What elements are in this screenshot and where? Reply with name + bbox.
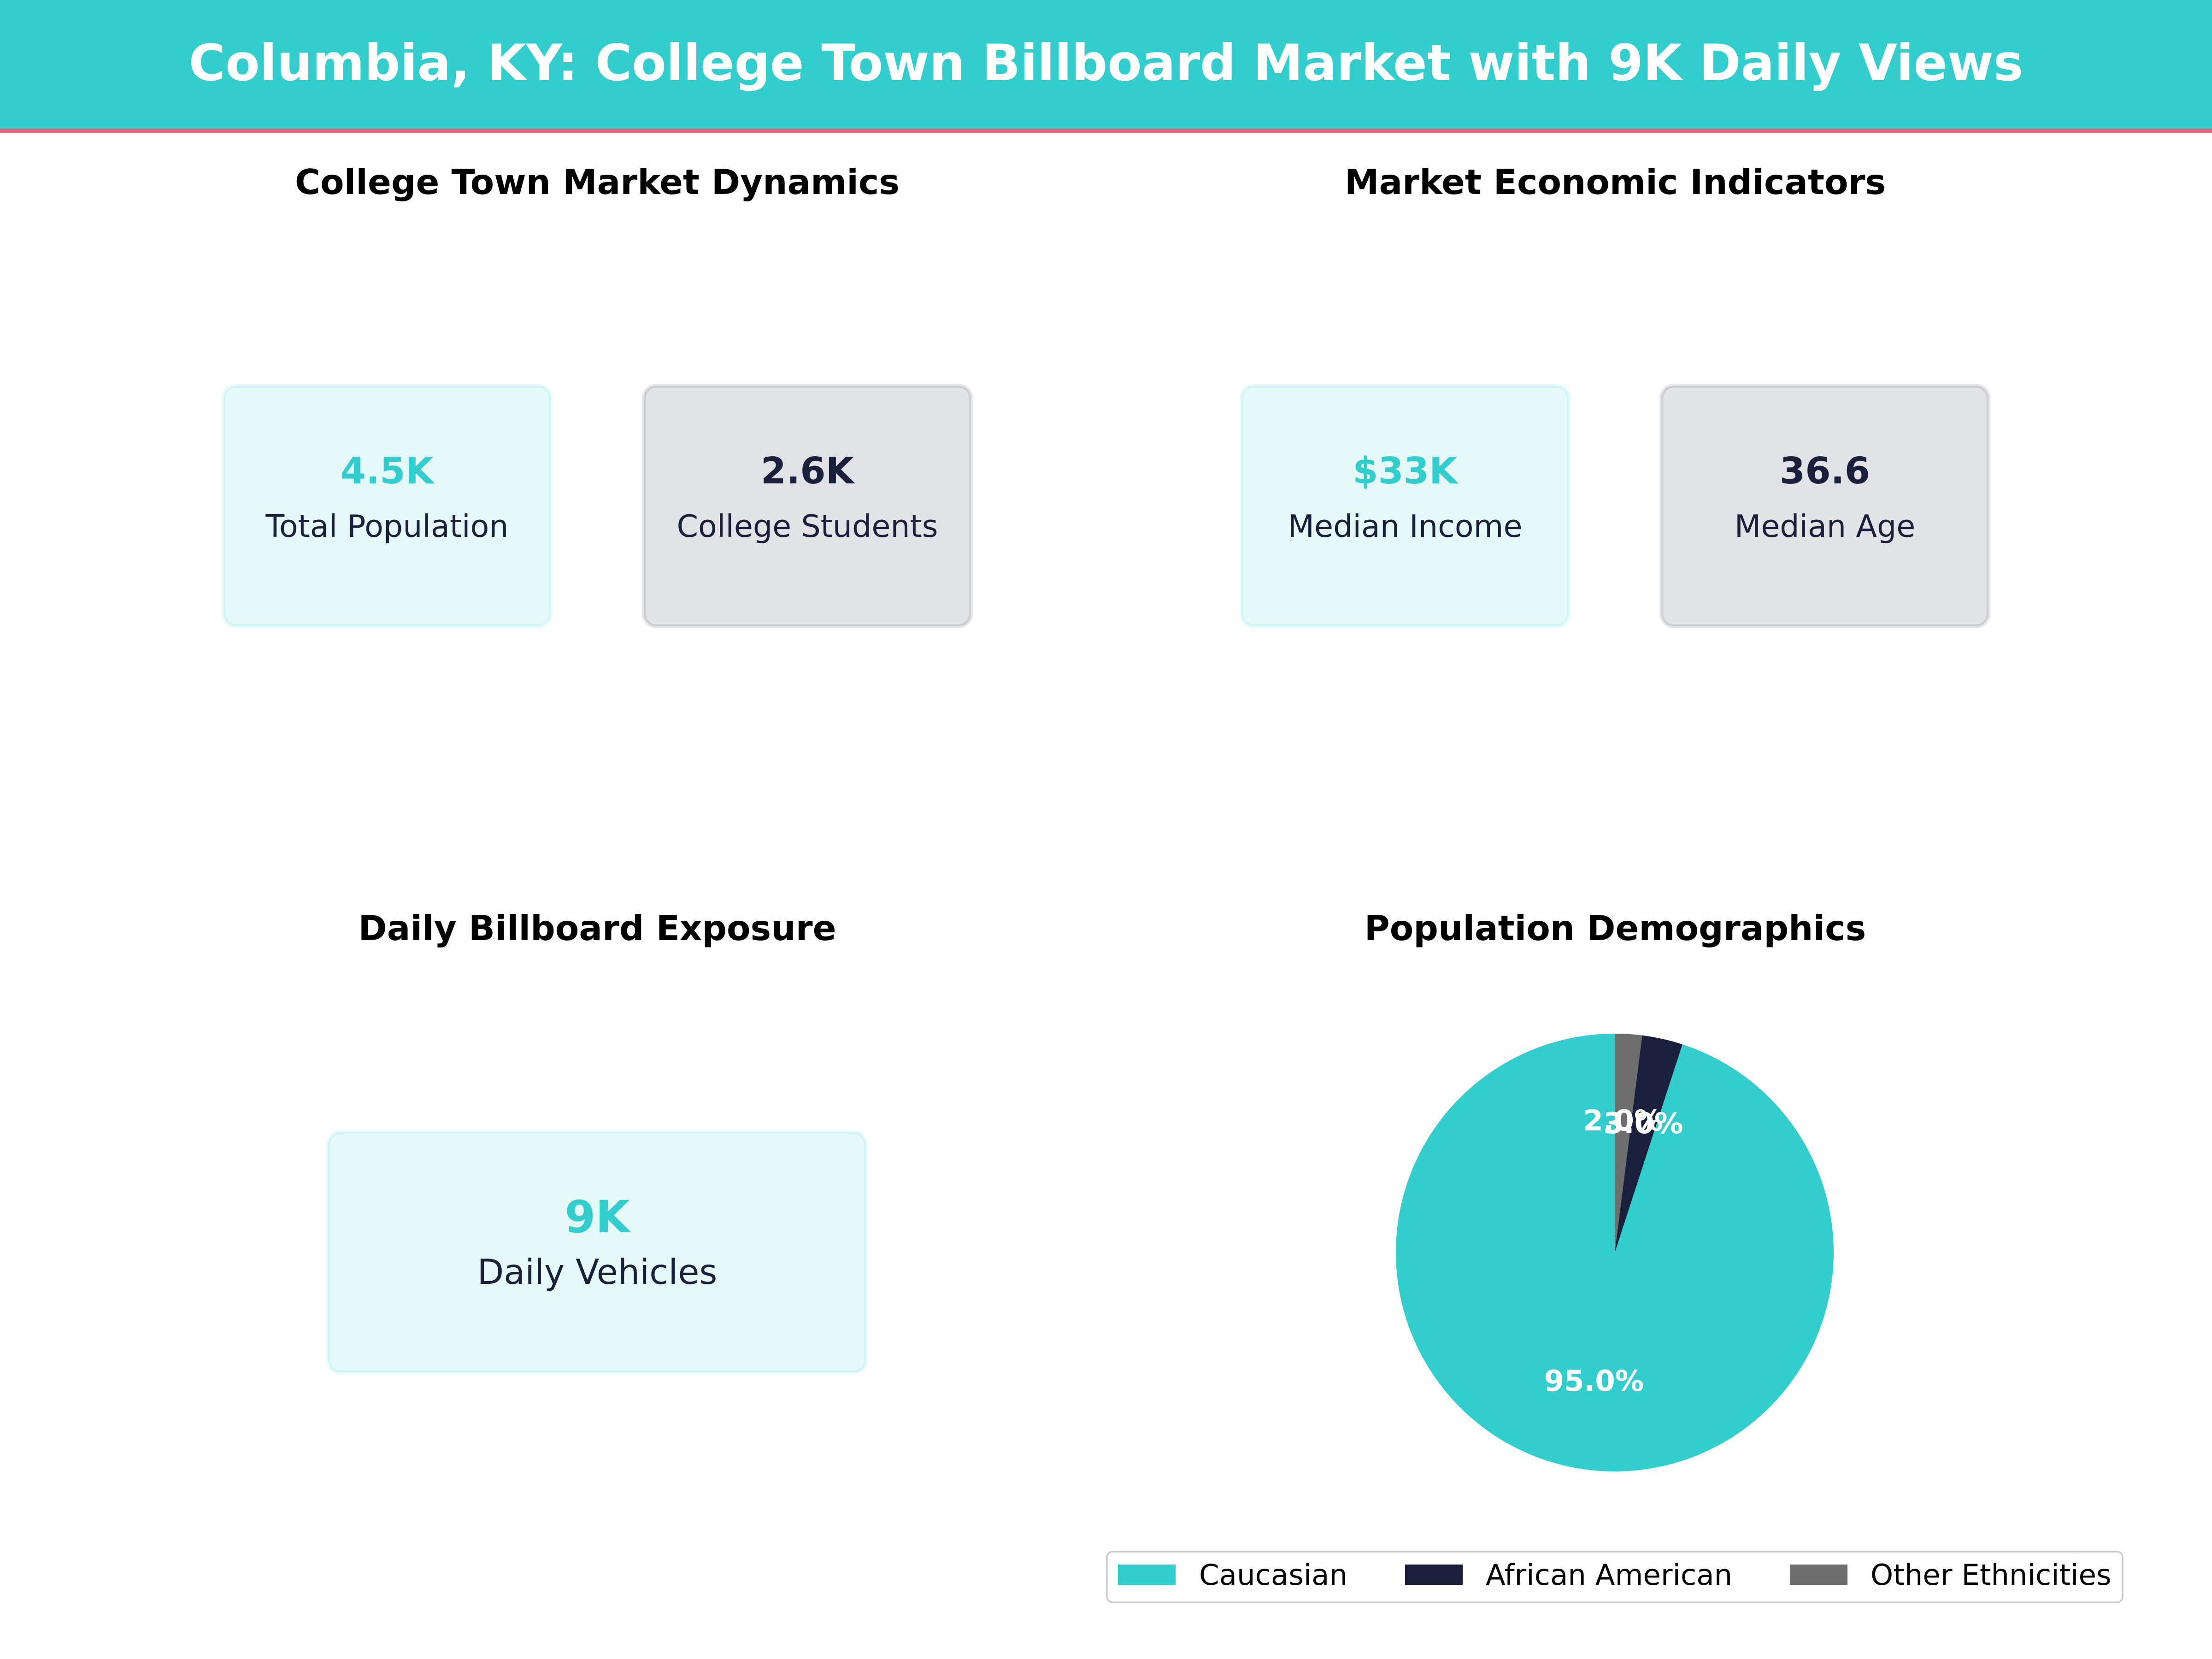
- stat card: median age: 36.6: [1780, 449, 1870, 492]
- stat card: total population: [224, 386, 551, 626]
- heading: market economic indicators: Market Economic Indicators: [1345, 162, 1886, 202]
- header banner: [0, 0, 2212, 133]
- pie chart: 3.0%: [1603, 1106, 1683, 1140]
- pie chart: 95.0%: [1544, 1364, 1644, 1398]
- stat card: college students: [644, 386, 971, 626]
- heading: college town market dynamics: College Town Market Dynamics: [295, 162, 900, 202]
- stat card: college students: 2.6K: [761, 449, 856, 492]
- legend: Caucasian: [1199, 1558, 1347, 1592]
- panel: market economic indicators: [1241, 162, 1988, 626]
- title: Columbia, KY: College Town Billboard Market with 9K Daily Views: [189, 34, 2023, 92]
- pie chart: [1396, 1034, 1834, 1471]
- heading: population demographics: Population Demographics: [1365, 908, 1866, 948]
- legend: [1107, 1552, 2123, 1602]
- stat card: median age: [1661, 386, 1988, 626]
- legend: Other Ethnicities: [1871, 1558, 2112, 1592]
- panel: daily billboard exposure: [328, 908, 866, 1372]
- stat card: median age: Median Age: [1735, 508, 1915, 544]
- legend: African American: [1486, 1558, 1732, 1592]
- stat card: daily vehicles: 9K: [565, 1191, 631, 1243]
- stat card: college students: College Students: [677, 508, 938, 544]
- stat card: daily vehicles: Daily Vehicles: [477, 1252, 717, 1292]
- stat card: total population: 4.5K: [341, 449, 435, 492]
- stat card: total population: Total Population: [265, 508, 509, 544]
- stat card: median income: [1241, 386, 1569, 626]
- stat card: daily vehicles: [328, 1132, 866, 1372]
- heading: daily billboard exposure: Daily Billboard Exposure: [359, 908, 836, 948]
- stat card: median income: $33K: [1353, 449, 1459, 492]
- panel: population demographics: [1107, 908, 2123, 1602]
- pie chart: 2.0%: [1583, 1104, 1663, 1137]
- panel: college town market dynamics: [224, 162, 971, 626]
- stat card: median income: Median Income: [1288, 508, 1522, 544]
